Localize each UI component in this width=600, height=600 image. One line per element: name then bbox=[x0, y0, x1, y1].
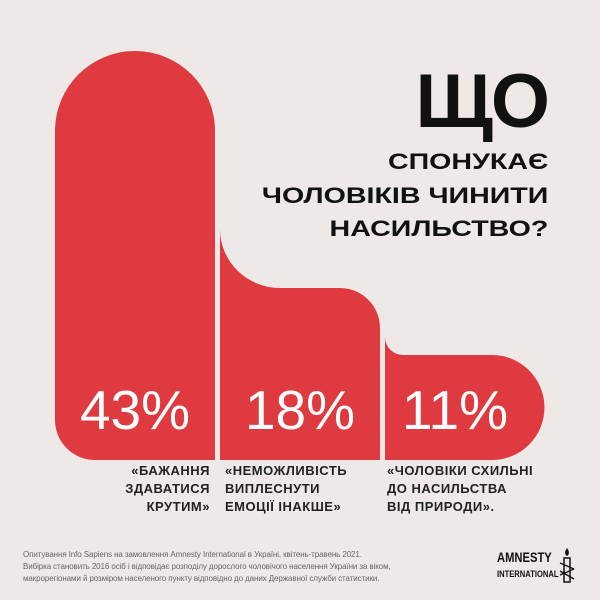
label: 18%: «НЕМОЖЛИВІСТЬ bbox=[225, 463, 347, 478]
bar: 18%: 18% bbox=[245, 379, 355, 441]
bar: 43% bbox=[55, 51, 215, 460]
label: 43%: ЗДАВАТИСЯ bbox=[125, 481, 210, 496]
logo: Amnesty International: INTERNATIONAL bbox=[497, 569, 558, 580]
footer note: Опитування Info Sapiens на замовлення Amnesty International в Україні, квітень-травень 2021. bbox=[23, 550, 362, 559]
label: 11%: «ЧОЛОВІКИ СХИЛЬНІ bbox=[387, 463, 533, 478]
logo: Amnesty International bbox=[497, 548, 574, 583]
subtitle: НАСИЛЬСТВО? bbox=[329, 216, 548, 241]
bar: 11% bbox=[385, 337, 544, 460]
label: 43%: «БАЖАННЯ bbox=[131, 463, 210, 478]
label: 18%: ВИПЛЕСНУТИ bbox=[225, 481, 320, 496]
footer note: макрорегіонами й розміром населеного пункту відповідно до даних Державної служби статистики. bbox=[23, 574, 379, 583]
label: 43%: КРУТИМ» bbox=[147, 499, 210, 514]
label: 11% bbox=[387, 463, 533, 514]
logo: Amnesty International: AMNESTY bbox=[497, 549, 552, 565]
subtitle bbox=[262, 149, 548, 241]
label: 43% bbox=[125, 463, 210, 514]
label: 18% bbox=[225, 463, 347, 514]
bar: 18% bbox=[220, 229, 380, 460]
icon: candle bbox=[560, 548, 574, 583]
footer note: Вибірка становить 2016 осіб і відповідає розподілу дорослого чоловічого населення України за віком, bbox=[23, 562, 391, 571]
label: 11%: ДО НАСИЛЬСТВА bbox=[387, 481, 507, 496]
label: 11%: ВІД ПРИРОДИ». bbox=[387, 499, 495, 514]
subtitle: СПОНУКАЄ bbox=[388, 149, 548, 174]
title: ЩО bbox=[415, 59, 548, 144]
footer note bbox=[23, 550, 391, 583]
bar: 43%: 43% bbox=[80, 379, 190, 441]
bar: 11%: 11% bbox=[402, 379, 508, 441]
label: 18%: ЕМОЦІЇ ІНАКШЕ» bbox=[225, 499, 341, 514]
subtitle: ЧОЛОВІКІВ ЧИНИТИ bbox=[262, 182, 548, 208]
